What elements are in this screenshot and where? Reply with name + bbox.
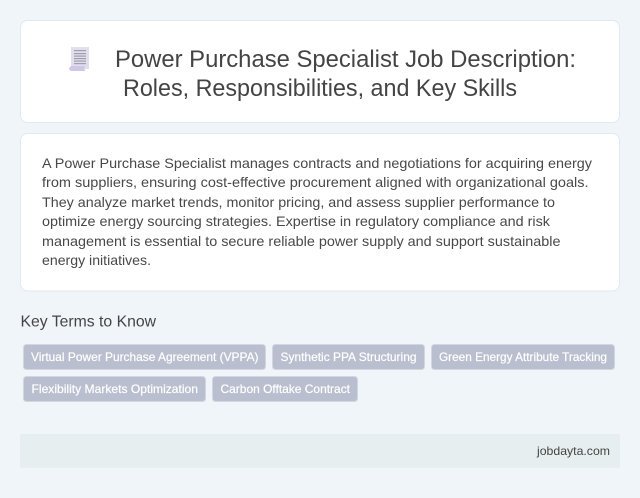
tag: carbon offtake: Carbon Offtake Contract: [220, 382, 351, 396]
tag list: [24, 344, 614, 402]
panel: description: [20, 134, 620, 291]
description text: They analyze market trends, monitor pricing, and assess supplier performance to: [42, 194, 555, 210]
description text: energy initiatives.: [42, 252, 151, 268]
tag: VPPA: Virtual Power Purchase Agreement (VPPA): [31, 350, 258, 364]
tag: synthetic PPA: [272, 344, 424, 370]
heading: key terms: Key Terms to Know: [20, 314, 156, 330]
tag: flexibility markets: [24, 376, 206, 402]
tag: carbon offtake: [212, 376, 358, 402]
tag: synthetic PPA: Synthetic PPA Structuring: [280, 350, 416, 364]
description text: management is essential to secure reliable power supply and support sustainable: [42, 233, 561, 249]
icon: document scroll: [69, 47, 89, 71]
footer source: jobdayta.com: [536, 444, 610, 458]
tag: flexibility markets: Flexibility Markets Optimization: [32, 382, 198, 396]
tag: green energy: Green Energy Attribute Tracking: [439, 350, 607, 364]
description text: [42, 155, 592, 268]
footer: [20, 434, 620, 468]
title: [115, 46, 576, 102]
tag: green energy: [432, 344, 614, 370]
panel: title card: [20, 20, 620, 122]
title: Roles, Responsibilities, and Key Skills: [123, 75, 517, 102]
title: Power Purchase Specialist Job Description:: [115, 46, 576, 73]
description text: optimize energy sourcing strategies. Expertise in regulatory compliance and risk: [42, 213, 551, 229]
tag: VPPA: [24, 344, 266, 370]
description text: A Power Purchase Specialist manages contracts and negotiations for acquiring energy: [42, 155, 592, 171]
description text: from suppliers, ensuring cost-effective procurement aligned with organizational goals.: [42, 174, 588, 190]
